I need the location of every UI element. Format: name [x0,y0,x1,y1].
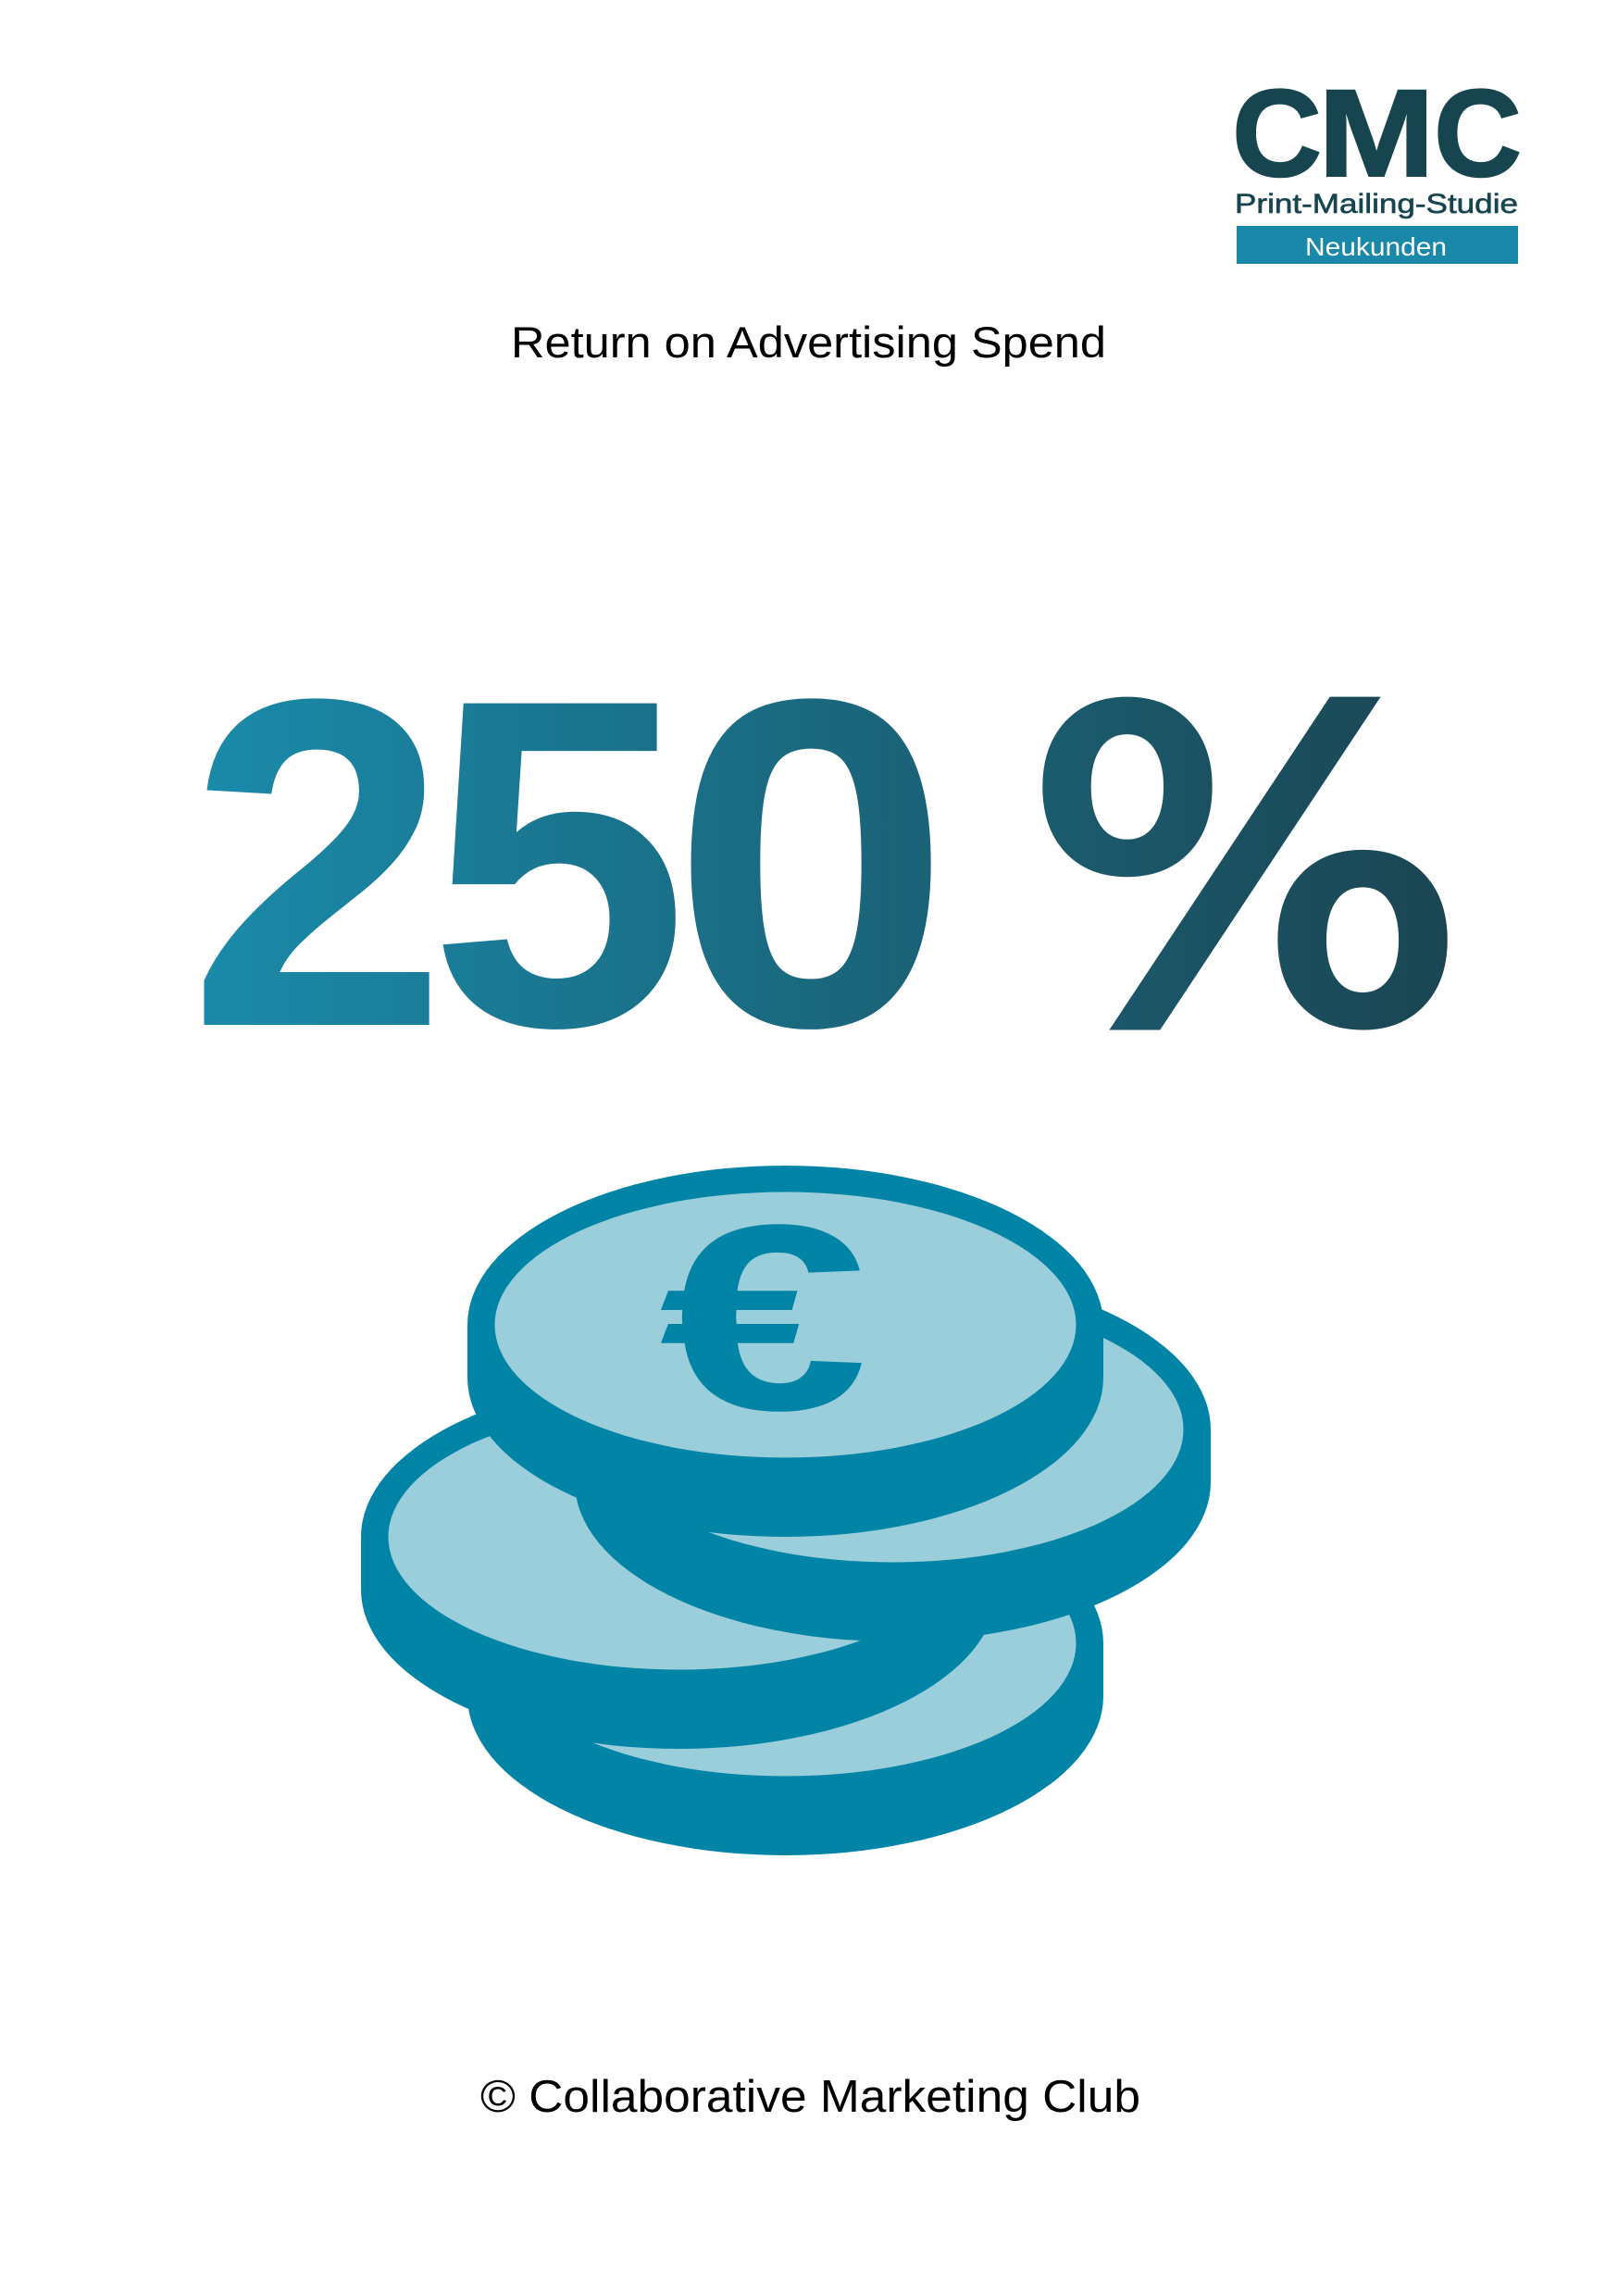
logo wordmark CMC: C [1232,65,1322,203]
coin: bottom [467,1484,1103,1855]
logo wordmark CMC [1232,65,1522,203]
footer copyright: © Collaborative Marketing Club [480,2072,1140,2122]
logo bar [1237,226,1518,264]
coin: right [575,1270,1211,1641]
euro symbol: € [659,1169,868,1466]
logo wordmark CMC: M [1318,65,1435,203]
number 5: 5 [429,603,689,1125]
coin: top with euro sign [467,1166,1103,1537]
icon: stack of euro coins [361,1166,1211,1855]
big number 250 % [188,603,1467,1125]
logo wordmark CMC: C [1434,65,1522,203]
logo: CMC Print-Mailing-Studie Neukunden [1232,65,1522,264]
number 0: 0 [671,603,952,1125]
coin: left [361,1378,997,1749]
logo bar label: Neukunden [1305,232,1447,261]
percent sign: % [1023,624,1467,1119]
number 2: 2 [188,603,448,1125]
logo subtitle: Print-Mailing-Studie [1235,189,1518,219]
heading: Return on Advertising Spend [511,318,1106,367]
